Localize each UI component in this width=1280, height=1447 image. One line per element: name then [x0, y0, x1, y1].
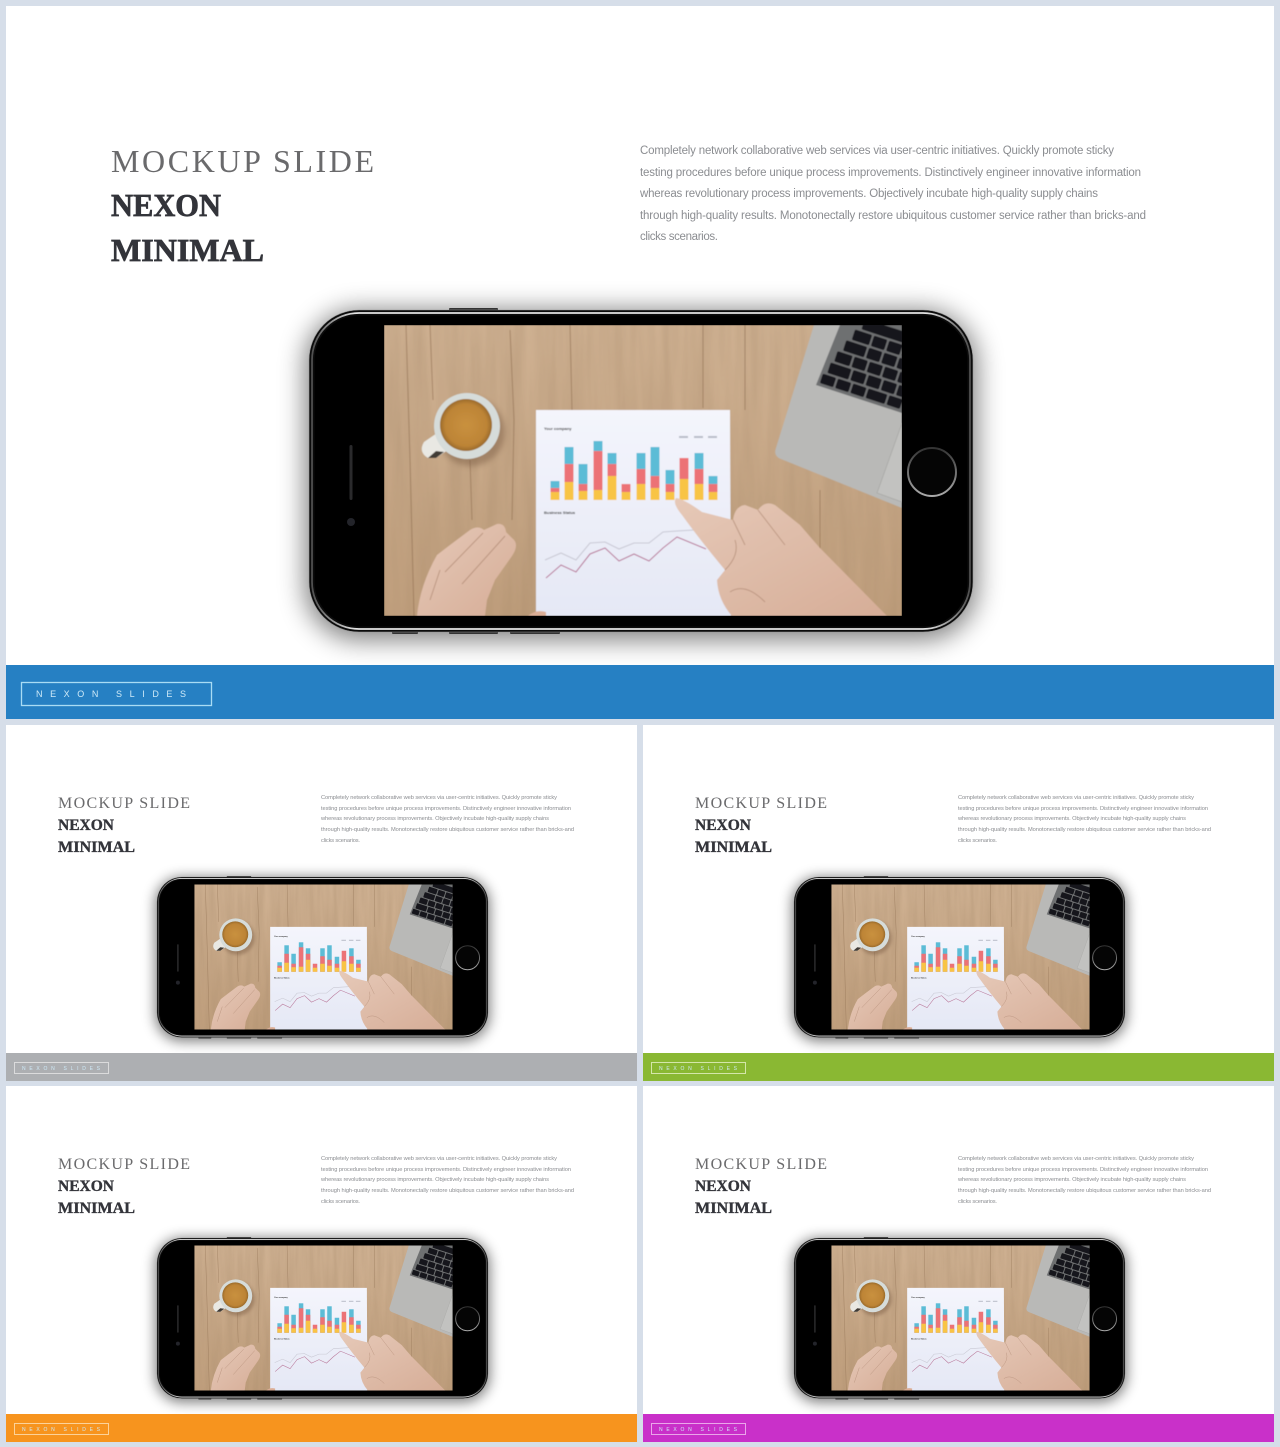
text block: description: testing procedures before unique process improvements. Distinctively engineer innovative information: [958, 1167, 1208, 1173]
title: [695, 795, 827, 856]
title: NEXON: [58, 1178, 114, 1195]
phone mockup with desk photo: [305, 308, 977, 640]
text block: description: Completely network collaborative web services via user-centric initiatives. Quickly promote sticky: [321, 795, 557, 801]
title: mockup slide nexon minimal: [111, 143, 374, 268]
text block: description: testing procedures before unique process improvements. Distinctively engineer innovative information: [958, 806, 1208, 812]
label box: NEXON SLIDES: [659, 1066, 738, 1072]
text block: description: testing procedures before unique process improvements. Distinctively engineer innovative information: [640, 167, 1141, 179]
label box: NEXON SLIDES: [659, 1427, 738, 1433]
text block: description: whereas revolutionary process improvements. Objectively incubate high-quality supply chains: [957, 816, 1186, 822]
footer band: green: [643, 1053, 1274, 1081]
label box: [14, 1424, 108, 1434]
panel: main slide, blue: [6, 6, 1274, 719]
text block: description: [320, 1156, 574, 1205]
text block: description: testing procedures before unique process improvements. Distinctively engineer innovative information: [321, 1167, 571, 1173]
title: mockup slide nexon minimal: MOCKUP SLIDE: [111, 143, 374, 179]
title: [58, 1156, 190, 1217]
text block: description: whereas revolutionary process improvements. Objectively incubate high-quality supply chains: [957, 1177, 1186, 1183]
panel: small slide, magenta: [643, 1086, 1274, 1442]
title: MINIMAL: [58, 839, 135, 856]
text block: description: whereas revolutionary process improvements. Objectively incubate high-quality supply chains: [320, 816, 549, 822]
text block: description: clicks scenarios.: [640, 231, 718, 243]
text block: description: through high-quality results. Monotonectally restore ubiquitous customer service rather than bricks-and: [958, 827, 1211, 833]
title: NEXON: [58, 817, 114, 834]
label box: nexon slides: NEXON SLIDES: [36, 689, 186, 699]
text block: description: [320, 795, 574, 844]
title: MINIMAL: [695, 1200, 772, 1217]
panel: small slide, gray: [6, 725, 637, 1081]
phone mockup with desk photo: [155, 1237, 490, 1403]
text block: description: through high-quality results. Monotonectally restore ubiquitous customer service rather than bricks-and: [321, 1188, 574, 1194]
text block: description: Completely network collaborative web services via user-centric initiatives. Quickly promote sticky: [321, 1156, 557, 1162]
text block: description: whereas revolutionary process improvements. Objectively incubate high-quality supply chains: [320, 1177, 549, 1183]
text block: description: through high-quality results. Monotonectally restore ubiquitous customer service rather than bricks-and: [321, 827, 574, 833]
label box: nexon slides: [22, 682, 212, 706]
phone mockup with desk photo: [792, 1237, 1127, 1403]
title: MOCKUP SLIDE: [695, 795, 827, 812]
title: [58, 795, 190, 856]
footer band: magenta: [643, 1414, 1274, 1442]
title: NEXON: [695, 1178, 751, 1195]
phone mockup with desk photo: [792, 876, 1127, 1042]
text block: description: clicks scenarios.: [321, 1199, 360, 1205]
title: MOCKUP SLIDE: [58, 795, 190, 812]
text block: description: Completely network collaborative web services via user-centric initiatives. Quickly promote sticky: [958, 1156, 1194, 1162]
text block: description: clicks scenarios.: [958, 1199, 997, 1205]
text block: description: whereas revolutionary process improvements. Objectively incubate high-quality supply chains: [639, 188, 1098, 200]
title: MOCKUP SLIDE: [695, 1156, 827, 1173]
label box: [652, 1424, 746, 1434]
title: mockup slide nexon minimal: NEXON: [111, 187, 221, 223]
title: [695, 1156, 827, 1217]
label box: NEXON SLIDES: [22, 1427, 101, 1433]
panel: small slide, green: [643, 725, 1274, 1081]
text block: description: [639, 145, 1146, 243]
text block: description: clicks scenarios.: [321, 838, 360, 844]
title: mockup slide nexon minimal: MINIMAL: [111, 232, 264, 268]
text block: description: [957, 1156, 1211, 1205]
footer band: blue: [6, 665, 1274, 719]
footer band: gray: [6, 1053, 637, 1081]
title: MINIMAL: [695, 839, 772, 856]
title: MINIMAL: [58, 1200, 135, 1217]
panel: small slide, orange: [6, 1086, 637, 1442]
text block: description: through high-quality results. Monotonectally restore ubiquitous customer service rather than bricks-and: [958, 1188, 1211, 1194]
text block: description: Completely network collaborative web services via user-centric initiatives. Quickly promote sticky: [958, 795, 1194, 801]
footer band: orange: [6, 1414, 637, 1442]
text block: description: clicks scenarios.: [958, 838, 997, 844]
title: MOCKUP SLIDE: [58, 1156, 190, 1173]
label box: NEXON SLIDES: [22, 1066, 101, 1072]
label box: [14, 1062, 108, 1074]
label box: [652, 1062, 746, 1074]
text block: description: Completely network collaborative web services via user-centric initiatives. Quickly promote sticky: [640, 145, 1114, 157]
text block: description: through high-quality results. Monotonectally restore ubiquitous customer service rather than bricks-and: [640, 210, 1146, 222]
text block: description: testing procedures before unique process improvements. Distinctively engineer innovative information: [321, 806, 571, 812]
phone mockup with desk photo: [155, 876, 490, 1042]
text block: description: [957, 795, 1211, 844]
title: NEXON: [695, 817, 751, 834]
